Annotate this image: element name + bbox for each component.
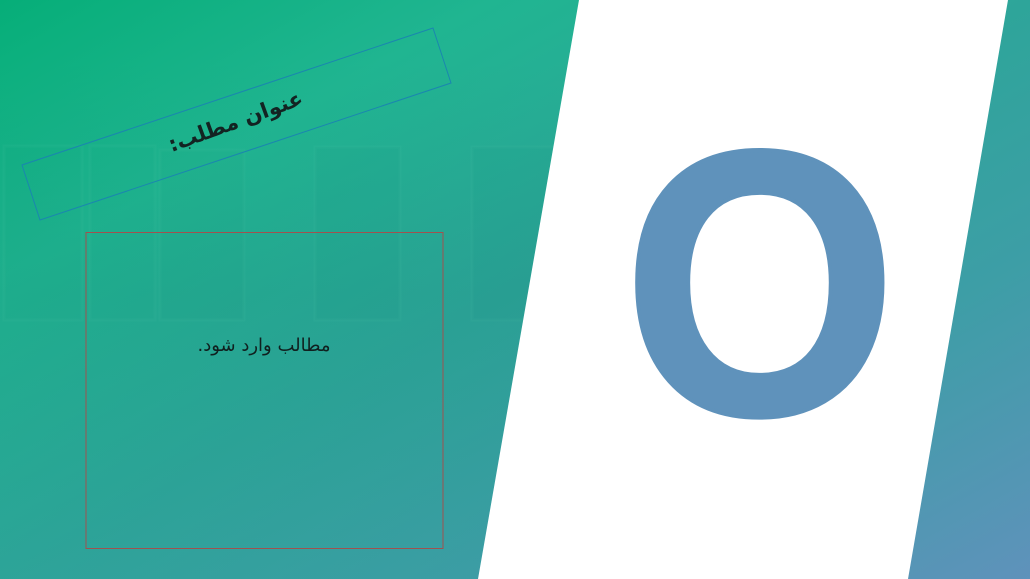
faint wall shading [0,60,580,579]
content box [86,232,443,548]
content text: مطالب وارد شود. [197,335,331,356]
big letter O: O [623,72,897,495]
title text: عنوان مطلب: [165,86,306,157]
title box [22,28,451,220]
faint background doors [4,146,562,320]
white slanted panel [478,0,1008,579]
